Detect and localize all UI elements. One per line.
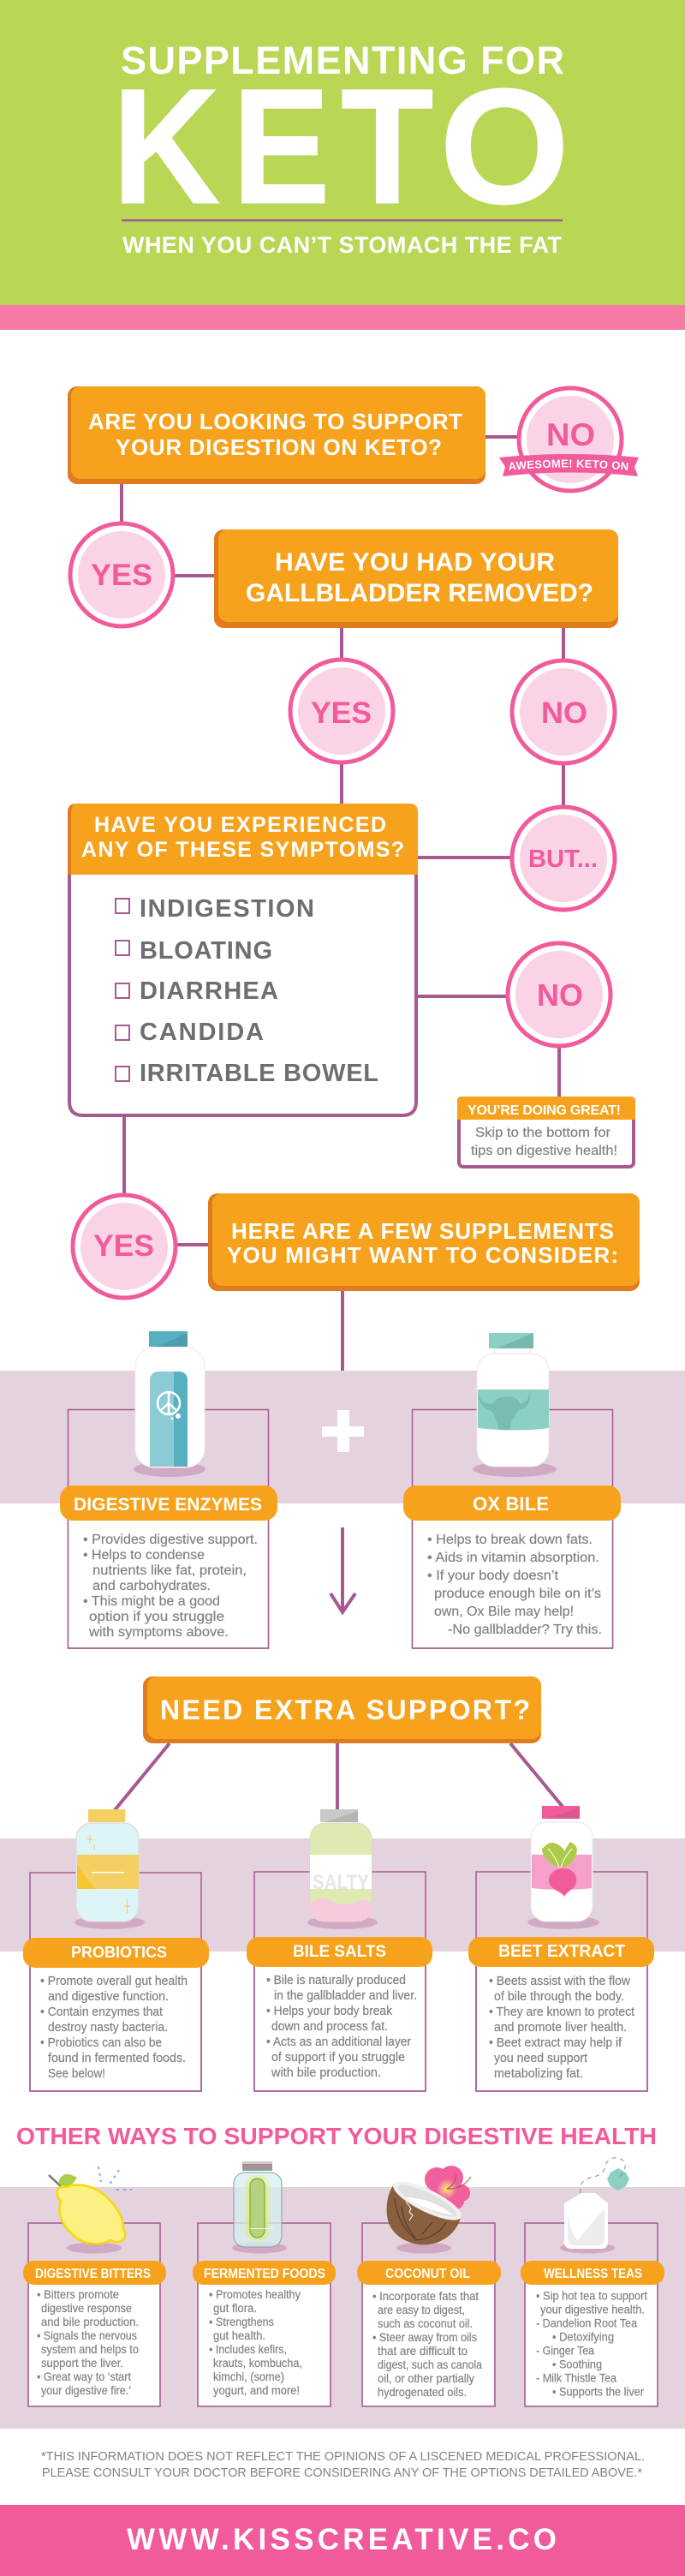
title pill: bile salts: BILE SALTS <box>293 1943 386 1961</box>
panel: fermented foods <box>193 2161 336 2406</box>
panel: beet extract <box>468 1806 654 2091</box>
text: digestive bitters list: support the liver. <box>41 2356 123 2370</box>
question box: support digestion <box>68 386 485 484</box>
checkbox list <box>116 895 378 1087</box>
disclaimer <box>41 2449 645 2480</box>
text: wellness teas list: • Detoxifying <box>552 2330 614 2344</box>
answer: YES <box>73 1195 176 1298</box>
text: coconut oil list: such as coconut oil. <box>378 2316 473 2330</box>
band: extra supplements <box>0 1838 685 1951</box>
icon: salts bottle: SALTY <box>313 1871 369 1894</box>
title pill: digestive bitters: DIGESTIVE BITTERS <box>35 2267 151 2281</box>
icon: lemon <box>49 2167 132 2253</box>
footer <box>0 2505 685 2576</box>
text: digestive enzymes list <box>83 1533 258 1640</box>
text: beet extract list: and promote liver health. <box>494 2021 627 2035</box>
heading box: need extra support: NEED EXTRA SUPPORT? <box>160 1694 530 1725</box>
text: bile salts list: down and process fat. <box>271 2020 388 2034</box>
text: beet extract list: • Beet extract may help if <box>489 2036 622 2050</box>
title pill: coconut oil <box>357 2261 501 2285</box>
text: beet extract list: you need support <box>494 2052 587 2065</box>
text: bile salts list: • Acts as an additional layer <box>266 2035 411 2049</box>
title: KETO <box>112 54 569 239</box>
answer: NO: NO <box>537 977 583 1013</box>
text: digestive bitters list: your digestive fire.’ <box>41 2383 131 2397</box>
panel: ox bile <box>403 1333 621 1648</box>
header banner <box>0 0 685 330</box>
title: KETO: T <box>341 56 433 239</box>
panel: digestive bitters <box>23 2167 166 2406</box>
text: digestive enzymes list: • Helps to condense <box>83 1548 205 1563</box>
symptoms heading: ANY OF THESE SYMPTOMS? <box>81 838 404 862</box>
checkbox list: IRRITABLE BOWEL <box>140 1060 378 1087</box>
title pill: coconut oil: COCONUT OIL <box>385 2267 470 2281</box>
callout: doing great: YOU’RE DOING GREAT! <box>468 1103 621 1118</box>
text: coconut oil list: digest, such as canola <box>378 2358 482 2371</box>
title pill: ox bile <box>403 1485 621 1521</box>
title: KETO: O <box>439 55 569 239</box>
title pill: fermented foods: FERMENTED FOODS <box>204 2267 325 2281</box>
question box: gallbladder: GALLBLADDER REMOVED? <box>246 579 593 607</box>
text: fermented foods list: • Strengthens <box>209 2315 274 2328</box>
answer: BUT: BUT... <box>528 846 598 873</box>
question box: supplements to consider: YOU MIGHT WANT TO CONSIDER: <box>227 1242 618 1268</box>
title pill: beet extract: BEET EXTRACT <box>498 1942 625 1961</box>
title pill: probiotics: PROBIOTICS <box>71 1944 167 1961</box>
icon: coconut and flower <box>387 2166 471 2253</box>
text: digestive bitters list: digestive response <box>41 2301 132 2315</box>
title pill: wellness teas <box>521 2261 664 2285</box>
text: wellness teas list: • Soothing <box>552 2358 602 2371</box>
checkbox list: BLOATING <box>140 937 272 965</box>
text: ox bile list: • If your body doesn’t <box>427 1569 559 1583</box>
callout: doing great: Skip to the bottom for <box>475 1126 611 1140</box>
title pill: probiotics <box>23 1938 209 1968</box>
text: wellness teas list: - Dandelion Root Tea <box>536 2316 637 2330</box>
title pill: digestive enzymes <box>60 1485 277 1521</box>
text: coconut oil list: oil, or other partially <box>378 2371 474 2385</box>
text: ox bile list: • Helps to break down fats. <box>427 1533 593 1547</box>
title pill: beet extract <box>468 1937 654 1967</box>
text: ox bile list <box>427 1533 602 1637</box>
text: probiotics list: found in fermented foods. <box>48 2052 186 2065</box>
title: KETO: K <box>112 54 220 238</box>
text: probiotics list <box>40 1975 188 2081</box>
text: fermented foods list: kimchi, (some) <box>213 2370 284 2383</box>
text: probiotics list: • Probiotics can also be <box>40 2036 162 2050</box>
symptoms heading <box>68 804 418 875</box>
text: digestive bitters list: system and helps to <box>41 2342 139 2356</box>
band: core supplements <box>0 1371 685 1503</box>
question box: supplements to consider: HERE ARE A FEW SUPPLEMENTS <box>231 1218 614 1244</box>
text: digestive enzymes list: nutrients like fat, protein, <box>92 1563 247 1578</box>
text: digestive enzymes list: • Provides digestive support. <box>83 1533 258 1547</box>
text: digestive bitters list <box>37 2287 139 2397</box>
text: ox bile list: -No gallbladder? Try this. <box>448 1623 602 1637</box>
text: wellness teas list: - Milk Thistle Tea <box>536 2371 616 2385</box>
icon: ox bottle <box>473 1333 557 1477</box>
text: ox bile list: • Aids in vitamin absorption. <box>427 1551 599 1565</box>
text: digestive bitters list: • Signals the nervous <box>37 2328 137 2342</box>
question box: supplements to consider <box>208 1193 640 1291</box>
title pill: digestive enzymes: DIGESTIVE ENZYMES <box>74 1495 262 1515</box>
text: coconut oil list: are easy to digest, <box>378 2303 465 2316</box>
text: digestive enzymes list: with symptoms above. <box>88 1625 229 1640</box>
icon: probiotics bottle <box>74 1809 145 1929</box>
text: coconut oil list <box>372 2289 482 2399</box>
answer: YES: YES <box>93 1229 154 1263</box>
answer: NO with ribbon <box>499 386 639 493</box>
panel: digestive enzymes <box>60 1331 277 1648</box>
text: beet extract list: • Beets assist with the flow <box>489 1975 631 1988</box>
text: fermented foods list: • Includes kefirs, <box>209 2342 287 2356</box>
icon: pickle jar <box>232 2161 287 2253</box>
text: coconut oil list: • Incorporate fats that <box>372 2289 479 2303</box>
text: beet extract list <box>489 1975 634 2081</box>
title: KETO: E <box>232 54 331 238</box>
answer: NO with ribbon: NO <box>546 417 595 452</box>
icon: beet bottle <box>527 1806 599 1929</box>
ribbon: awesome keto on <box>499 454 639 476</box>
panel: probiotics <box>23 1809 209 2091</box>
text: digestive bitters list: • Bitters promote <box>37 2287 119 2301</box>
band: other ways <box>0 2187 685 2429</box>
question box: support digestion: YOUR DIGESTION ON KETO? <box>116 434 442 460</box>
icon: tea bag <box>560 2158 629 2253</box>
title pill: wellness teas: WELLNESS TEAS <box>544 2267 642 2281</box>
checkbox list: CANDIDA <box>140 1019 264 1046</box>
panel: bile salts <box>247 1809 432 2091</box>
text: probiotics list: and digestive function. <box>48 1990 169 2004</box>
text: bile salts list: • Helps your body break <box>266 2005 393 2018</box>
answer: BUT <box>512 807 615 910</box>
disclaimer: PLEASE CONSULT YOUR DOCTOR BEFORE CONSIDERING ANY OF THE OPTIONS DETAILED ABOVE.* <box>42 2465 642 2480</box>
question box: gallbladder: HAVE YOU HAD YOUR <box>275 548 555 577</box>
heading box: need extra support <box>143 1676 541 1743</box>
text: fermented foods list: • Promotes healthy <box>209 2287 301 2301</box>
panel: coconut oil <box>357 2166 501 2406</box>
answer: NO <box>512 660 615 763</box>
subtitle: WHEN YOU CAN’T STOMACH THE FAT <box>122 232 562 258</box>
checkbox list: INDIGESTION <box>140 895 314 923</box>
connectors: extra support <box>115 1743 563 1810</box>
callout: doing great: tips on digestive health! <box>471 1144 617 1158</box>
title pill: bile salts <box>247 1937 432 1967</box>
arrow: down <box>331 1527 355 1612</box>
text: fermented foods list: gut flora. <box>213 2301 257 2315</box>
text: bile salts list: of support if you struggle <box>271 2051 405 2065</box>
text: fermented foods list: gut health. <box>213 2328 265 2342</box>
text: wellness teas list: • Sip hot tea to support <box>536 2289 647 2303</box>
question box: gallbladder <box>214 529 618 628</box>
text: wellness teas list: • Supports the liver <box>552 2385 644 2399</box>
text: bile salts list <box>266 1974 417 2080</box>
text: probiotics list: See below! <box>48 2067 105 2081</box>
text: coconut oil list: that are difficult to <box>378 2344 468 2358</box>
text: digestive enzymes list: • This might be a good <box>83 1594 220 1609</box>
text: bile salts list: with bile production. <box>271 2066 381 2080</box>
flowchart connectors <box>122 437 563 1371</box>
callout: doing great <box>457 1097 635 1167</box>
answer: NO <box>508 943 611 1046</box>
text: digestive enzymes list: option if you struggle <box>89 1610 224 1624</box>
checkbox list: DIARRHEA <box>140 977 278 1005</box>
text: probiotics list: destroy nasty bacteria. <box>48 2021 168 2035</box>
text: beet extract list: of bile through the body. <box>494 1990 624 2004</box>
panel: symptoms checklist <box>68 804 418 1115</box>
title pill: ox bile: OX BILE <box>473 1493 549 1515</box>
text: beet extract list: • They are known to protect <box>489 2005 634 2019</box>
text: ox bile list: own, Ox Bile may help! <box>434 1605 574 1619</box>
answer: NO with ribbon: AWESOME! KETO ON <box>509 459 628 470</box>
title pill: fermented foods <box>193 2261 336 2285</box>
symptoms heading: HAVE YOU EXPERIENCED <box>94 813 386 837</box>
answer: YES: YES <box>311 696 372 730</box>
icon: peace bottle <box>134 1331 206 1477</box>
text: digestive bitters list: and bile production. <box>41 2315 139 2328</box>
text: ox bile list: produce enough bile on it’s <box>434 1587 601 1601</box>
question box: support digestion: ARE YOU LOOKING TO SUPPORT <box>88 409 462 434</box>
text: wellness teas list: your digestive health. <box>540 2303 645 2316</box>
text: digestive enzymes list: and carbohydrates. <box>92 1579 211 1593</box>
text: wellness teas list: - Ginger Tea <box>536 2344 594 2358</box>
icon: salts bottle <box>307 1809 378 1929</box>
text: beet extract list: metabolizing fat. <box>494 2067 583 2081</box>
title line: SUPPLEMENTING FOR <box>121 39 564 82</box>
panel: wellness teas <box>521 2158 664 2406</box>
text: fermented foods list: yogurt, and more! <box>213 2383 300 2397</box>
text: coconut oil list: hydrogenated oils. <box>378 2385 467 2399</box>
disclaimer: *THIS INFORMATION DOES NOT REFLECT THE OPINIONS OF A LISCENED MEDICAL PROFESSIONAL. <box>41 2449 645 2464</box>
text: bile salts list: in the gallbladder and liver. <box>274 1989 417 2003</box>
text: probiotics list: • Contain enzymes that <box>40 2005 163 2019</box>
answer: NO: NO <box>541 696 587 730</box>
text: probiotics list: • Promote overall gut health <box>40 1975 188 1988</box>
text: wellness teas list <box>536 2289 647 2399</box>
text: fermented foods list <box>209 2287 302 2397</box>
footer: WWW.KISSCREATIVE.CO <box>127 2523 557 2556</box>
heading: other ways: OTHER WAYS TO SUPPORT YOUR DIGESTIVE HEALTH <box>16 2123 657 2149</box>
title pill: digestive bitters <box>23 2261 166 2285</box>
text: coconut oil list: • Steer away from oils <box>372 2330 477 2344</box>
icon: plus <box>322 1410 364 1452</box>
answer: YES <box>290 660 393 762</box>
text: fermented foods list: krauts, kombucha, <box>213 2356 302 2370</box>
answer: YES <box>70 523 173 626</box>
answer: YES: YES <box>91 559 152 592</box>
text: bile salts list: • Bile is naturally produced <box>266 1974 406 1987</box>
text: digestive bitters list: • Great way to ‘start <box>37 2370 131 2383</box>
